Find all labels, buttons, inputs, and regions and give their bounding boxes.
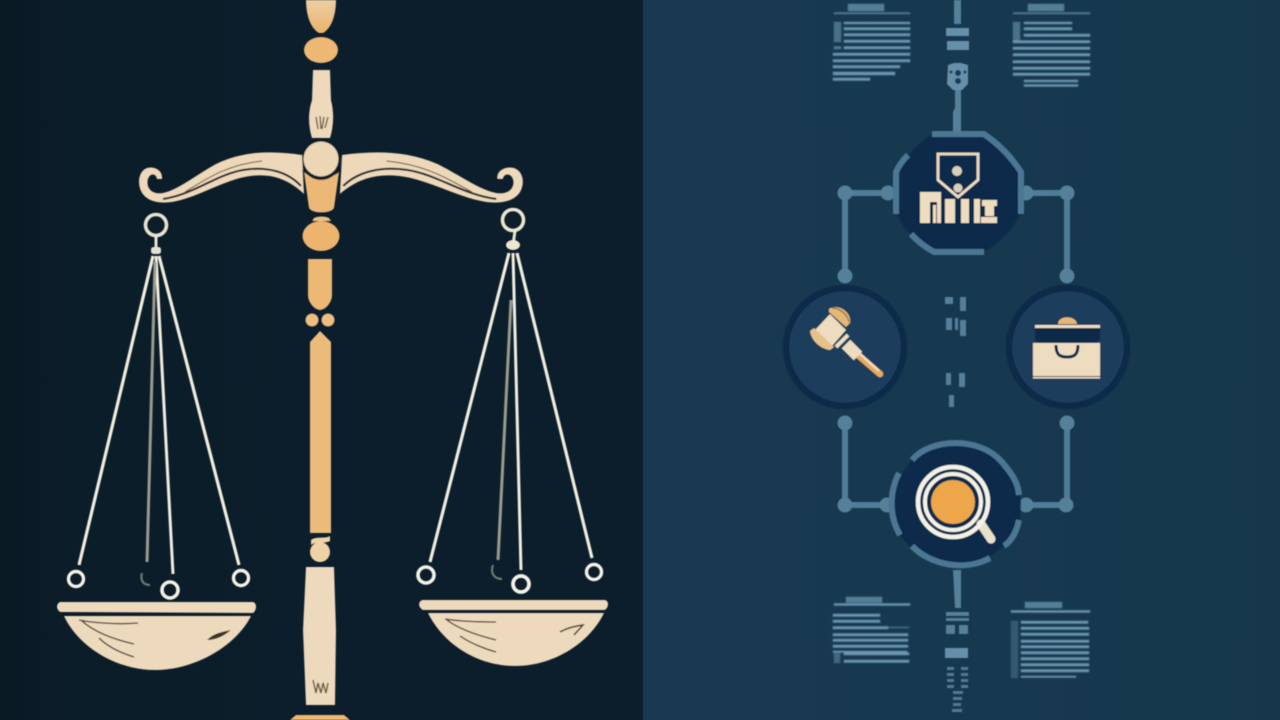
hanger: left strings and rings <box>68 214 248 598</box>
node: left circle with gavel icon <box>786 288 904 406</box>
icon: shield <box>938 154 978 197</box>
connector: top vertical chain <box>946 0 969 132</box>
pan: left bowl <box>57 602 256 670</box>
icon: gavel <box>810 307 880 374</box>
panel: dark left background <box>0 0 643 720</box>
text block: centre vertical labels <box>945 297 966 407</box>
node: right circle with briefcase icon <box>1009 288 1127 406</box>
text block: top left <box>833 4 910 80</box>
beam: right arm <box>340 152 523 203</box>
pan: right bowl <box>419 600 608 666</box>
text block: top right <box>1013 4 1090 86</box>
icon: briefcase <box>1033 317 1100 378</box>
node: bottom hub with magnifier icon <box>892 440 1021 567</box>
connector: bottom vertical chain <box>945 570 969 712</box>
icon: magnifier <box>918 467 991 539</box>
hanger: right strings and rings <box>418 210 602 592</box>
text block: bottom right <box>1011 602 1090 678</box>
beam: left arm <box>139 152 304 203</box>
node: top hub with shield and buildings icon <box>896 134 1021 252</box>
diagram: connector lines and nodes <box>838 186 1074 512</box>
panel: blue right background <box>643 0 1280 720</box>
text block: bottom left <box>833 597 910 663</box>
column: central pillar <box>290 0 350 720</box>
illustration: scales of justice <box>57 0 608 720</box>
icon: buildings <box>920 192 997 223</box>
